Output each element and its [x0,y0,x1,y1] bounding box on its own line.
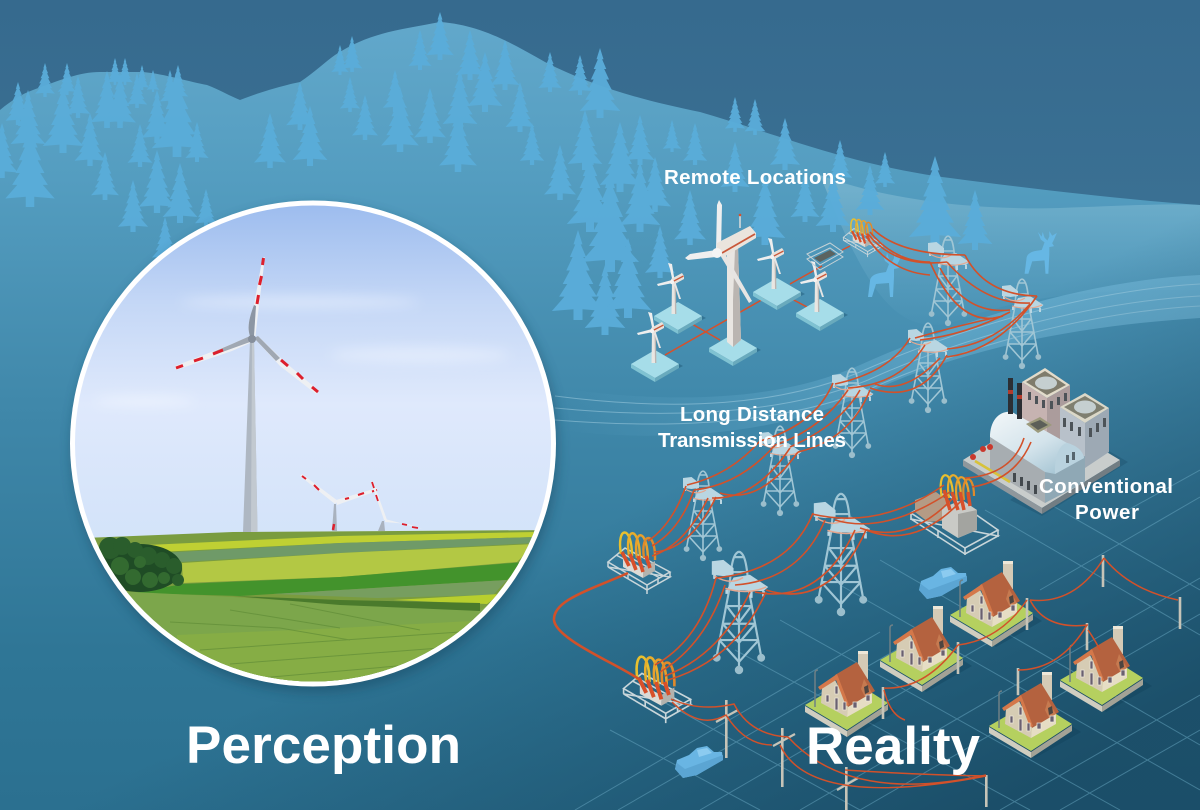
transmission cables [554,229,1037,680]
panel: perception photo [60,200,560,700]
wind farm [631,200,850,382]
heading: reality: Reality [806,717,981,776]
label: long distance transmission lines: Long Distance [680,403,824,426]
big turbine [175,257,319,532]
photo scene [60,200,560,700]
label: conventional power [1039,475,1173,524]
turbine pads [631,278,848,382]
forest [0,12,992,335]
tree clump [98,537,184,592]
large turbine [685,200,756,347]
river [555,275,1200,436]
left tower [1022,382,1047,440]
small converter box [807,243,843,270]
transmission towers [683,236,1044,674]
far turbine 1 [300,474,377,531]
chimneys [1008,378,1022,419]
icon: deer near line [868,252,902,297]
icon: car near houses [919,567,967,599]
substations [608,219,998,723]
heading: perception: Perception [186,716,461,775]
distribution cables [671,558,1178,788]
label: long distance transmission lines [658,403,846,452]
substation west [608,532,670,594]
remote substation [843,219,882,257]
substation east with transformer [911,475,998,555]
plant feeder cables [965,438,1031,487]
label: long distance transmission lines: Transmission Lines [658,429,846,452]
right tower [1060,407,1085,470]
houses [805,561,1152,758]
small turbines [637,238,827,363]
photo shadow [72,206,558,692]
icon: deer right [1025,231,1057,274]
icon: car street [675,746,723,778]
lighter slope [820,175,1200,325]
street grid [575,470,1200,810]
power plant [963,368,1128,516]
far turbine 2 [371,481,423,531]
distribution poles [716,555,1181,810]
label: conventional power: Power [1075,501,1139,524]
photo frame [70,200,556,686]
substation southwest [624,657,691,723]
turbine hall [990,437,1045,503]
label: remote locations: Remote Locations [664,166,846,189]
collector cables [665,246,850,355]
label: conventional power: Conventional [1039,475,1173,498]
field bands [94,530,535,682]
